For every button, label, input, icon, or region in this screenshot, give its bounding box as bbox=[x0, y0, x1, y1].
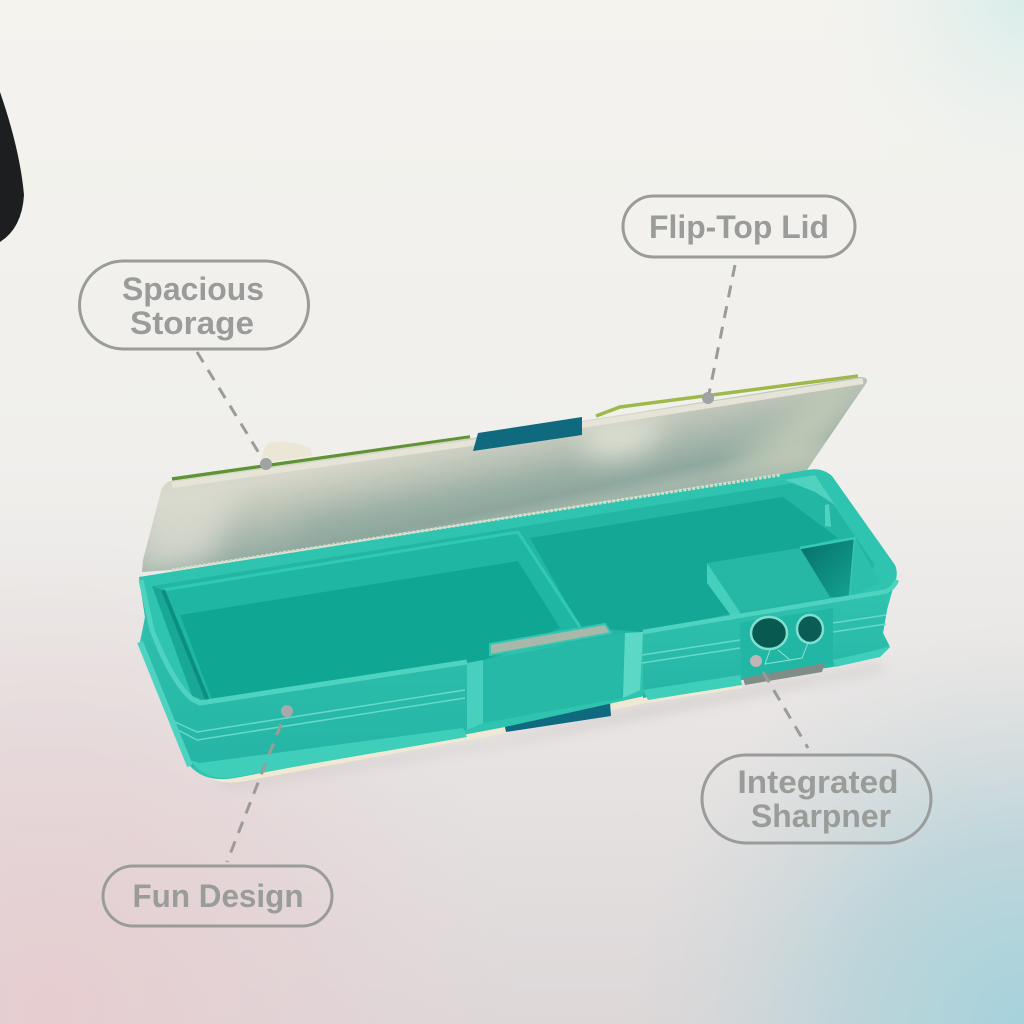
callout: Fun Design bbox=[103, 705, 332, 926]
sharpener plate bbox=[740, 608, 833, 685]
lid bbox=[140, 376, 867, 575]
lid inner panel bbox=[142, 377, 867, 572]
tab left side bbox=[467, 660, 483, 730]
label line 2: Sharpner bbox=[751, 798, 891, 834]
anchor dot bbox=[702, 392, 714, 404]
pill bbox=[103, 866, 332, 926]
stitched seam bbox=[172, 475, 780, 570]
tab light side bbox=[623, 632, 643, 698]
lid soft highlights bbox=[140, 385, 860, 575]
label: Fun Design bbox=[132, 878, 304, 914]
upper blue clasp bbox=[473, 417, 582, 451]
anchor dot bbox=[260, 458, 272, 470]
wall rim bbox=[141, 580, 467, 703]
leader line bbox=[709, 265, 735, 394]
wall ridges bbox=[642, 615, 886, 663]
left tray bbox=[163, 532, 580, 702]
lid light rim bbox=[172, 381, 863, 485]
teal base body bbox=[139, 469, 897, 779]
label: Flip-Top Lid bbox=[649, 209, 829, 245]
left end channel bbox=[152, 586, 210, 702]
callout: Integrated Sharpner bbox=[702, 655, 931, 843]
leader line bbox=[197, 352, 262, 458]
front wall right bbox=[642, 580, 897, 700]
small divider rib bbox=[825, 504, 831, 527]
dark object at top-left edge bbox=[0, 92, 24, 242]
left end flange bbox=[140, 642, 190, 766]
small pocket bbox=[800, 538, 855, 597]
large hole bbox=[751, 617, 787, 649]
small hole bbox=[797, 615, 823, 643]
wall face bbox=[139, 577, 467, 768]
callout: Spacious Storage bbox=[80, 261, 308, 470]
wall face bbox=[643, 592, 889, 698]
sharpener block top bbox=[707, 548, 830, 612]
metal clasp insert bbox=[490, 624, 611, 655]
wall ridges bbox=[175, 690, 465, 740]
leader line bbox=[227, 724, 281, 862]
engraved balloon strings bbox=[765, 643, 808, 664]
center tab bbox=[467, 632, 643, 730]
lower flange bbox=[190, 728, 467, 778]
label line 1: Integrated bbox=[738, 764, 898, 800]
tray walls bbox=[163, 532, 580, 702]
tray floor bbox=[180, 561, 560, 700]
lower blue clasp bbox=[503, 702, 611, 732]
lid printed edge left bbox=[172, 437, 470, 479]
right wall of base bbox=[850, 538, 880, 597]
tab face bbox=[483, 633, 625, 723]
anchor dot bbox=[281, 705, 293, 717]
shadow under box bbox=[210, 662, 885, 788]
anchor dot bbox=[750, 655, 762, 667]
pencil box product bbox=[139, 376, 897, 788]
leader line bbox=[763, 672, 808, 748]
tray left lip bbox=[163, 590, 208, 701]
cream outer cover under base bbox=[200, 682, 742, 783]
rear inner ledge bbox=[152, 482, 875, 700]
label line 1: Spacious bbox=[122, 271, 264, 307]
pill bbox=[702, 755, 931, 843]
tray outer lip bbox=[163, 532, 580, 627]
pill bbox=[623, 196, 855, 257]
front wall left bbox=[139, 577, 467, 778]
lower flange bbox=[643, 647, 890, 700]
light rear corner of rim bbox=[785, 475, 835, 505]
sharpener block left face bbox=[707, 563, 740, 628]
pocket rim bbox=[800, 538, 855, 597]
metal strip bbox=[743, 663, 825, 685]
right compartment floor bbox=[530, 497, 838, 632]
cream tab on lid edge bbox=[261, 442, 312, 463]
pill bbox=[80, 261, 308, 349]
label line 2: Storage bbox=[130, 305, 254, 341]
wall rim bbox=[643, 580, 897, 632]
lid printed edge right bbox=[596, 376, 858, 416]
callout: Flip-Top Lid bbox=[623, 196, 855, 404]
